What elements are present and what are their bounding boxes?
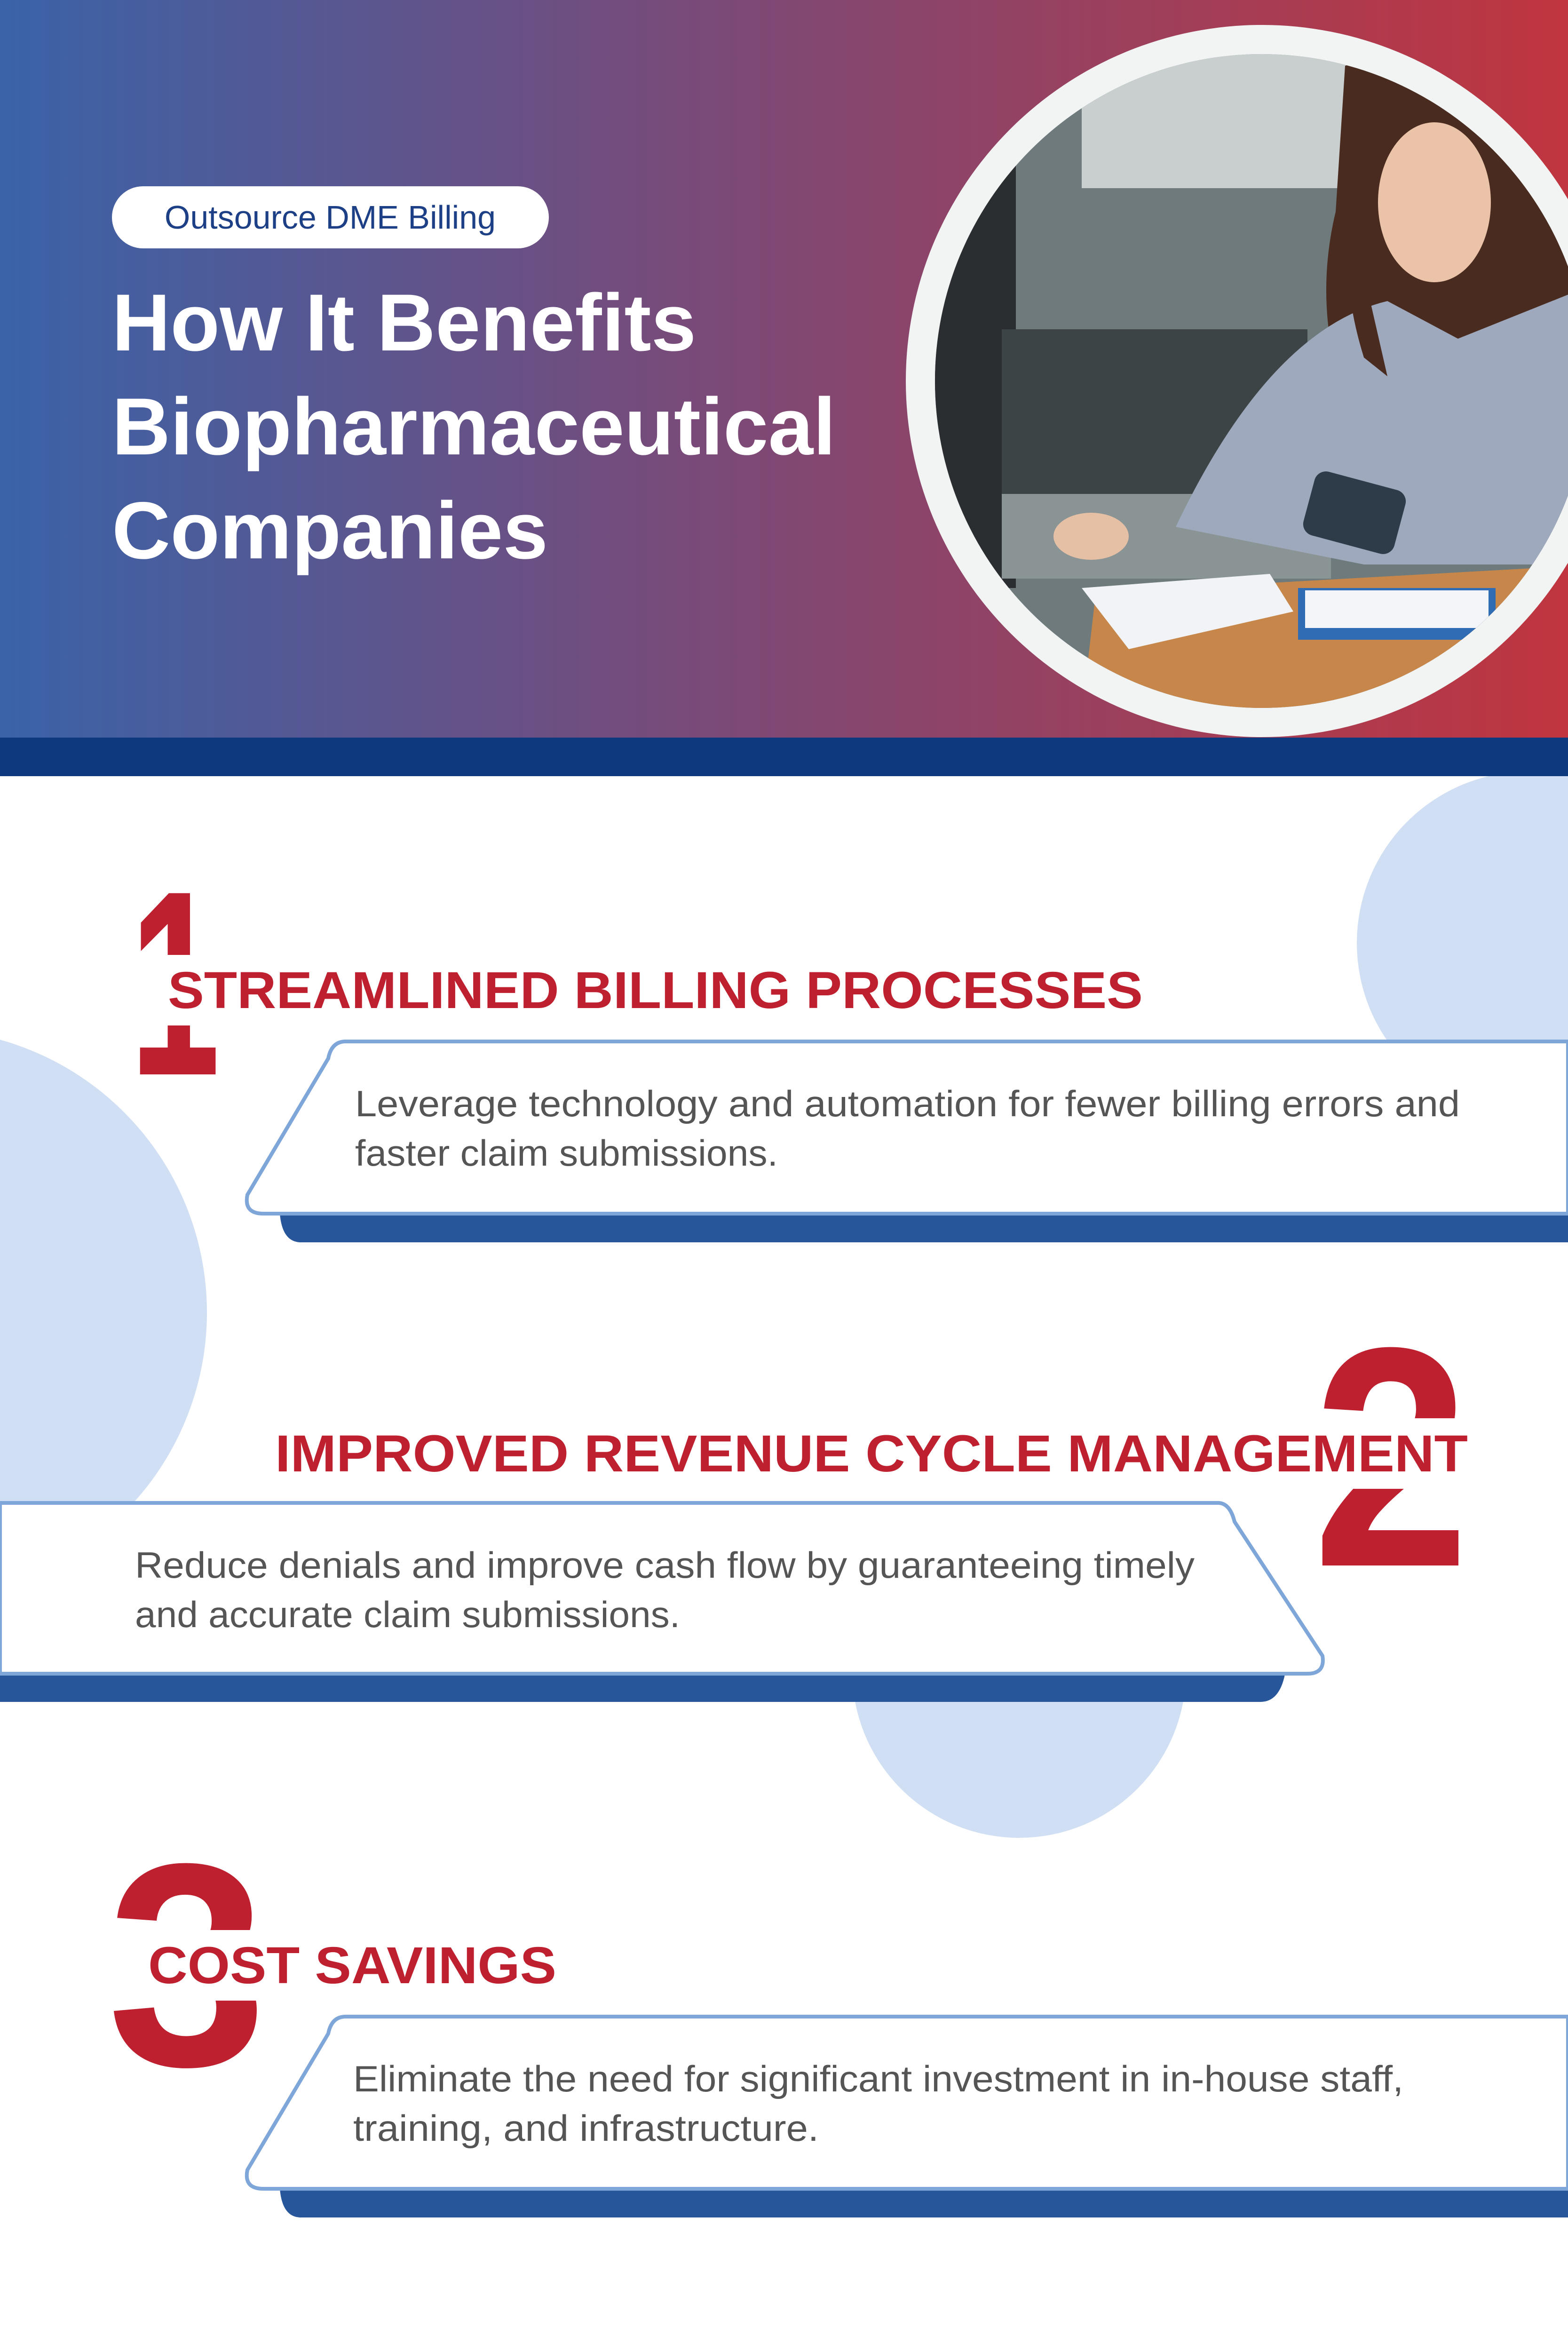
heading 1: STREAMLINED BILLING PROCESSES (168, 961, 1143, 1019)
pill label (112, 186, 549, 248)
title: Biopharmaceutical (112, 381, 836, 472)
card 3: training, and infrastructure. (353, 2107, 819, 2149)
title: Companies (112, 485, 548, 576)
heading 2: IMPROVED REVENUE CYCLE MANAGEMENT (275, 1425, 1468, 1483)
card 1: faster claim submissions. (355, 1132, 778, 1174)
card 2 (0, 1503, 1323, 1702)
number 3: 3 (107, 1804, 267, 2127)
pill label: Outsource DME Billing (165, 199, 496, 236)
card 3 (247, 2017, 1568, 2217)
background circles (0, 776, 1568, 1838)
section 3 (107, 1804, 1568, 2217)
number 2: 2 (1313, 1282, 1470, 1632)
section 2 (0, 1282, 1482, 1702)
number 1: 1 (130, 836, 220, 1130)
section 1 (130, 836, 1568, 1242)
title (112, 278, 836, 576)
card 2: and accurate claim submissions. (135, 1594, 680, 1635)
photo circle (906, 25, 1568, 737)
header background (0, 0, 1568, 740)
title: How It Benefits (112, 278, 696, 368)
heading 3: COST SAVINGS (148, 1937, 556, 1994)
card 1: Leverage technology and automation for fewer billing errors and (355, 1083, 1460, 1124)
card 3: Eliminate the need for significant investment in in-house staff, (353, 2058, 1403, 2099)
card 1 (247, 1041, 1568, 1242)
card 2: Reduce denials and improve cash flow by guaranteeing timely (135, 1544, 1195, 1586)
header navy band (0, 738, 1568, 776)
